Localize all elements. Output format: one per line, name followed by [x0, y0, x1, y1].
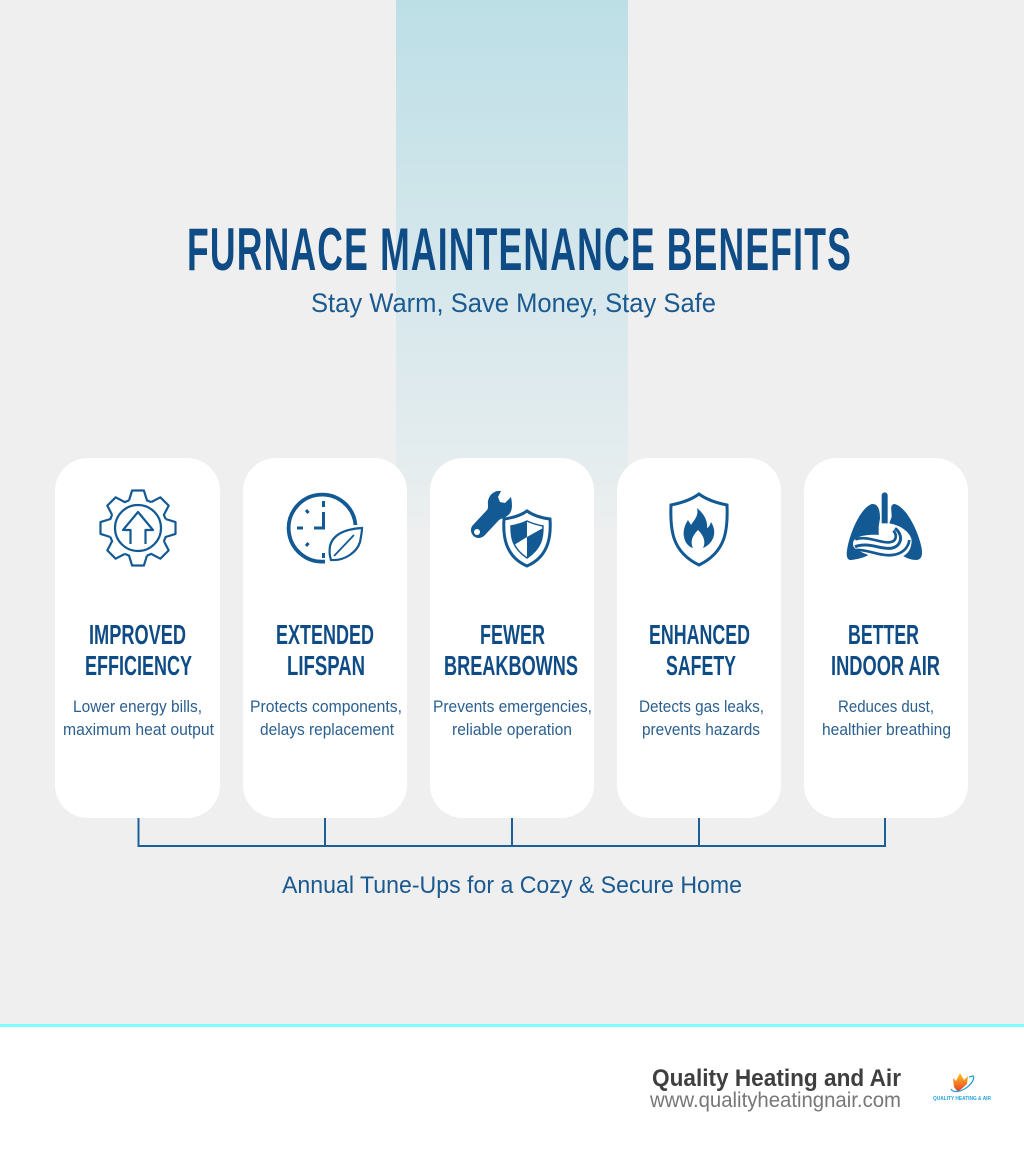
subtitle: Stay Warm, Save Money, Stay Safe	[311, 288, 716, 318]
text: enhanced safety description	[639, 697, 764, 739]
closing tagline: Annual Tune-Ups for a Cozy & Secure Home	[282, 872, 742, 899]
heading: improved efficiency	[85, 619, 192, 681]
text: improved efficiency description	[63, 697, 214, 739]
icon: gear with up arrow	[100, 490, 176, 566]
heading: enhanced safety: SAFETY	[666, 650, 736, 681]
vertical light blue band	[396, 0, 628, 530]
heading: fewer breakbowns: BREAKBOWNS	[444, 650, 578, 681]
heading: improved efficiency: EFFICIENCY	[85, 650, 192, 681]
text: enhanced safety description: Detects gas leaks,	[639, 697, 764, 716]
heading: enhanced safety	[649, 619, 750, 681]
logo	[933, 1073, 992, 1102]
text: extended lifespan description: delays replacement	[260, 720, 394, 739]
heading: better indoor air: INDOOR AIR	[831, 650, 940, 681]
icon: lungs with air swirl	[847, 492, 922, 560]
footer	[0, 1024, 1024, 1154]
website: www.qualityheatingnair.com	[649, 1089, 901, 1112]
heading: fewer breakbowns	[444, 619, 578, 681]
heading: enhanced safety: ENHANCED	[649, 619, 750, 650]
footer accent line	[0, 1024, 1024, 1027]
text: improved efficiency description: Lower energy bills,	[73, 697, 202, 716]
text: extended lifespan description	[250, 697, 402, 739]
heading: fewer breakbowns: FEWER	[480, 619, 545, 650]
panel: fewer breakdowns	[430, 458, 594, 818]
icon: shield with flame	[671, 494, 727, 565]
text: enhanced safety description: prevents hazards	[642, 720, 760, 739]
company name: Quality Heating and Air	[652, 1065, 901, 1092]
text: improved efficiency description: maximum heat output	[63, 720, 214, 739]
heading: improved efficiency: IMPROVED	[89, 619, 186, 650]
panel: extended lifespan	[243, 458, 407, 818]
text: fewer breakdowns description: Prevents emergencies,	[433, 697, 592, 716]
heading: extended lifspan	[276, 619, 374, 681]
logo: QUALITY HEATING & AIR	[933, 1096, 992, 1102]
text: better indoor air description: Reduces dust,	[838, 697, 934, 716]
heading: better indoor air: BETTER	[848, 619, 919, 650]
panel: enhanced safety	[617, 458, 781, 818]
text: fewer breakdowns description: reliable operation	[452, 720, 572, 739]
heading: extended lifspan: EXTENDED	[276, 619, 374, 650]
text: fewer breakdowns description	[433, 697, 592, 739]
heading: extended lifspan: LIFSPAN	[287, 650, 365, 681]
panel: improved efficiency	[55, 458, 220, 818]
icon: wrench and shield	[471, 491, 550, 566]
icon: clock with leaf	[289, 495, 362, 562]
panel: better indoor air	[804, 458, 968, 818]
heading: better indoor air	[831, 619, 940, 681]
text: better indoor air description: healthier breathing	[822, 720, 951, 739]
text: better indoor air description	[822, 697, 951, 739]
text: extended lifespan description: Protects components,	[250, 697, 402, 716]
connector bracket	[138, 818, 885, 846]
